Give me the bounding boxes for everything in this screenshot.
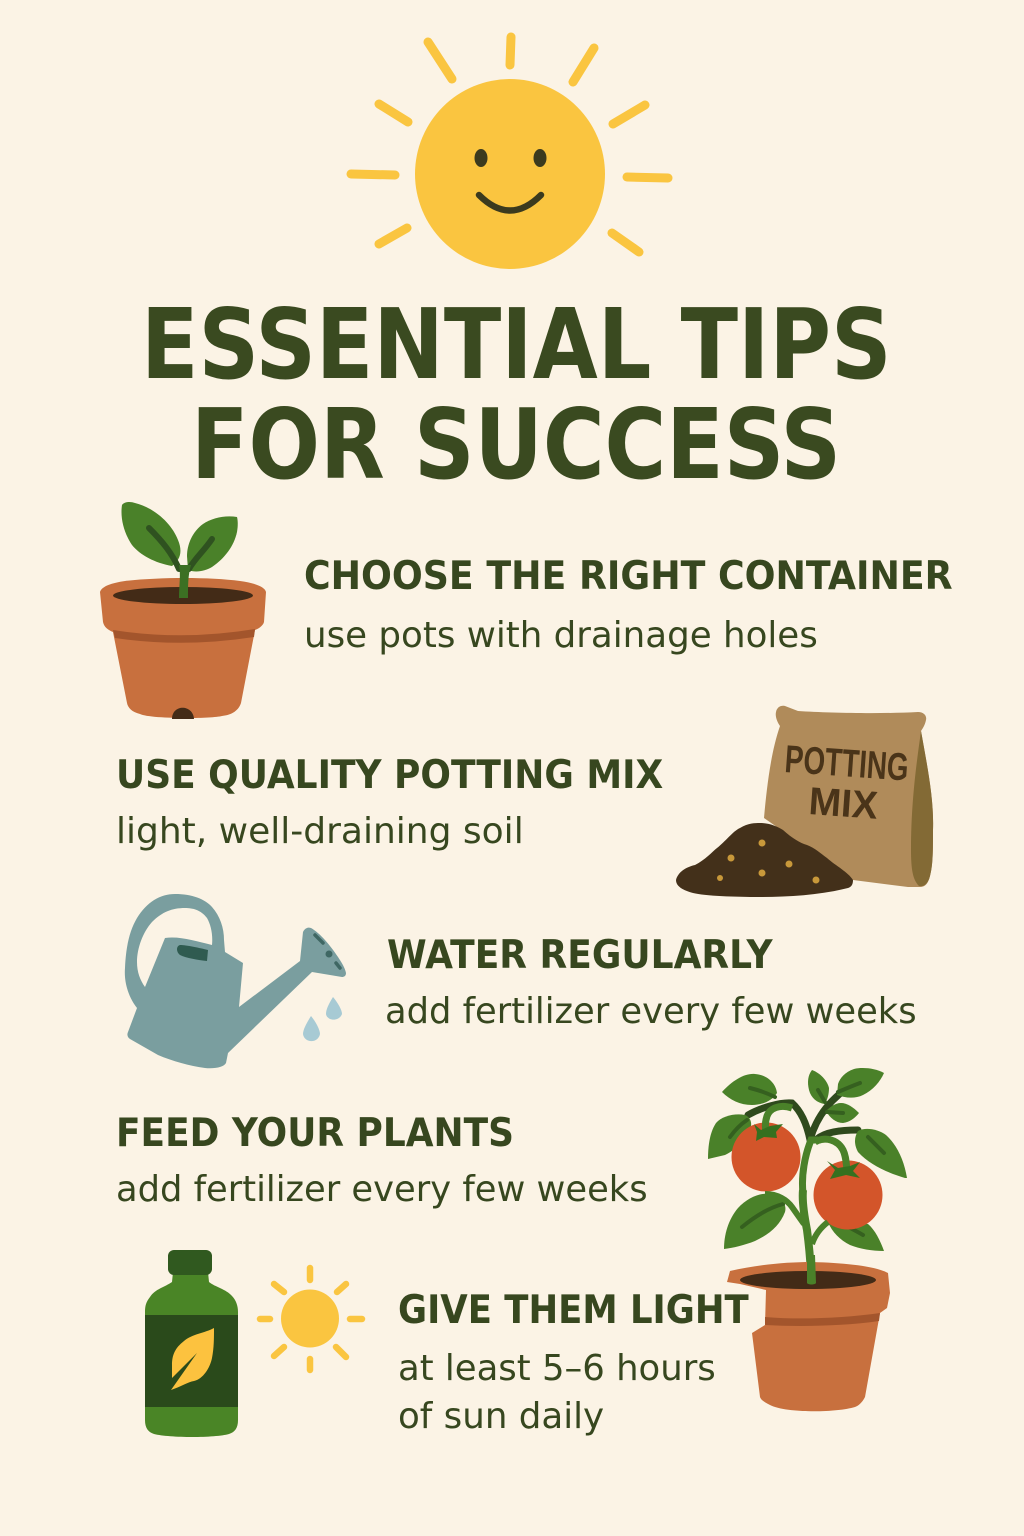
- title: [141, 288, 892, 501]
- heading: light: GIVE THEM LIGHT: [398, 1288, 749, 1333]
- icon: small sun: [256, 1264, 366, 1374]
- text: soil: light, well-draining soil: [116, 811, 524, 852]
- heading: feed: FEED YOUR PLANTS: [116, 1111, 514, 1156]
- heading: choose container: CHOOSE THE RIGHT CONTAINER: [304, 554, 953, 599]
- title: FOR SUCCESS: [191, 388, 841, 501]
- icon: smiling sun: [346, 32, 672, 269]
- icon: potting mix bag and soil: [676, 706, 934, 897]
- text: light detail line 2: of sun daily: [398, 1396, 604, 1437]
- text: feed detail: add fertilizer every few weeks: [116, 1169, 648, 1210]
- heading: potting mix: USE QUALITY POTTING MIX: [116, 753, 663, 798]
- icon: potting mix bag and soil: MIX: [807, 780, 879, 828]
- title: ESSENTIAL TIPS: [141, 288, 892, 401]
- text: drainage: use pots with drainage holes: [304, 615, 818, 656]
- icon: tomato plant in pot: [708, 1068, 907, 1412]
- icon: fertilizer bottle: [145, 1250, 238, 1437]
- text: light detail: at least 5–6 hours: [398, 1348, 716, 1389]
- icon: potted seedling: [100, 502, 266, 719]
- icon: potting mix bag and soil: POTTING: [783, 738, 910, 790]
- text: water detail: add fertilizer every few weeks: [385, 991, 917, 1032]
- heading: water: WATER REGULARLY: [387, 933, 773, 978]
- icon: watering can: [124, 894, 346, 1068]
